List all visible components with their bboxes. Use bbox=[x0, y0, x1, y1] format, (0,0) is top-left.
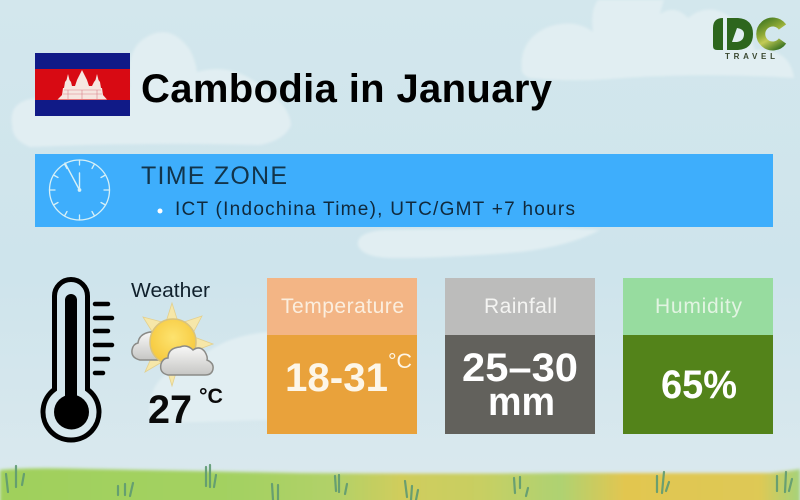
humidity label: Humidity bbox=[655, 295, 742, 318]
icon: thermometer bbox=[43, 280, 112, 440]
temperature unit: °C bbox=[388, 350, 412, 373]
panel: time zone bbox=[35, 154, 773, 227]
icon: clock bbox=[50, 160, 110, 220]
panel: humidity bbox=[623, 278, 773, 434]
bullet item: ICT (Indochina Time), UTC/GMT +7 hours bbox=[175, 199, 575, 220]
flag of Cambodia bbox=[35, 53, 130, 116]
large cloud bbox=[161, 346, 213, 375]
panel: rainfall bbox=[445, 278, 595, 434]
humidity value: 65% bbox=[661, 363, 737, 407]
sun rays bbox=[143, 303, 213, 386]
weather temperature: 27 bbox=[148, 388, 192, 432]
small cloud bbox=[132, 332, 165, 360]
rainfall label: Rainfall bbox=[484, 295, 557, 318]
logo: IDC Travel bbox=[713, 18, 782, 61]
rainfall value: 25–30 bbox=[462, 346, 578, 390]
temperature value: 18-31 bbox=[285, 356, 388, 400]
grass tufts bbox=[6, 465, 792, 500]
rainfall unit: mm bbox=[488, 380, 555, 424]
weather temperature bbox=[148, 385, 223, 432]
sun disc bbox=[150, 319, 196, 365]
grass strip bbox=[0, 465, 800, 500]
temperature label: Temperature bbox=[281, 295, 404, 318]
heading: time zone: TIME ZONE bbox=[141, 162, 287, 190]
Angkor Wat emblem bbox=[58, 70, 107, 100]
weather label: Weather bbox=[131, 280, 210, 302]
weather temperature: °C bbox=[199, 385, 223, 408]
logo word: TRAVEL bbox=[725, 52, 775, 61]
icon: sun and clouds bbox=[132, 303, 213, 386]
title: Cambodia in January bbox=[141, 67, 553, 111]
panel: temperature bbox=[267, 278, 417, 434]
